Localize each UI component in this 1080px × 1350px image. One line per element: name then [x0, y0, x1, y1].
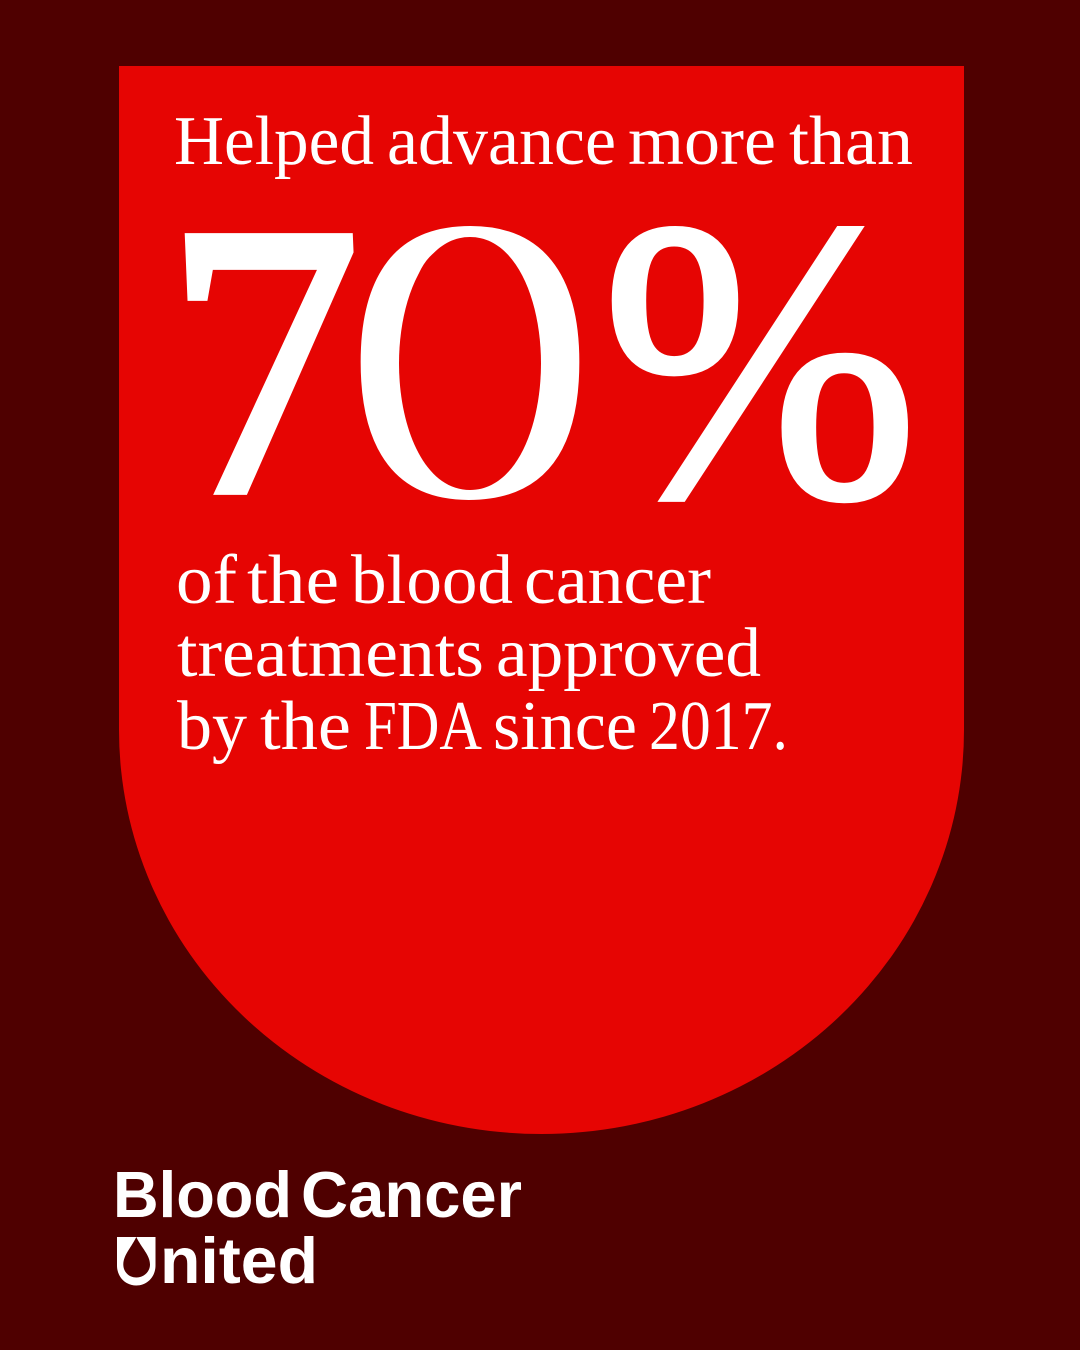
heading: intro line: more — [628, 103, 776, 180]
text block: statistic description: approved — [496, 615, 761, 692]
text block: statistic description: of — [176, 542, 238, 619]
text block: statistic description: since — [493, 688, 637, 765]
text block: statistic description: by — [177, 688, 247, 765]
text block: statistic description: blood — [351, 542, 513, 619]
heading: intro line: than — [789, 103, 913, 180]
text block: statistic description — [176, 542, 788, 765]
text block: statistic description: cancer — [524, 542, 711, 619]
panel: red shield — [119, 66, 964, 1134]
heading: intro line — [174, 103, 913, 180]
logo text: Blood Cancer: Blood — [113, 1158, 292, 1231]
logo text: nited: nited — [160, 1224, 318, 1297]
text block: statistic description: the — [247, 542, 339, 619]
logo: Blood Cancer United — [113, 1158, 522, 1297]
logo text: Blood Cancer: Cancer — [301, 1158, 522, 1231]
text block: statistic description: the — [260, 688, 351, 765]
text block: statistic description: 2017. — [649, 688, 788, 765]
heading: intro line: advance — [387, 103, 616, 180]
big statistic: 70%: 7 — [159, 145, 375, 575]
big statistic: 70%: % — [602, 139, 918, 582]
logo text: Blood Cancer — [113, 1158, 522, 1231]
icon: U with water drop — [117, 1237, 156, 1286]
text block: statistic description: treatments — [177, 615, 484, 692]
big statistic: 70%: 0 — [341, 135, 599, 584]
big statistic: 70% — [159, 135, 918, 584]
text block: statistic description: FDA — [364, 688, 482, 765]
heading: intro line: Helped — [174, 103, 374, 180]
